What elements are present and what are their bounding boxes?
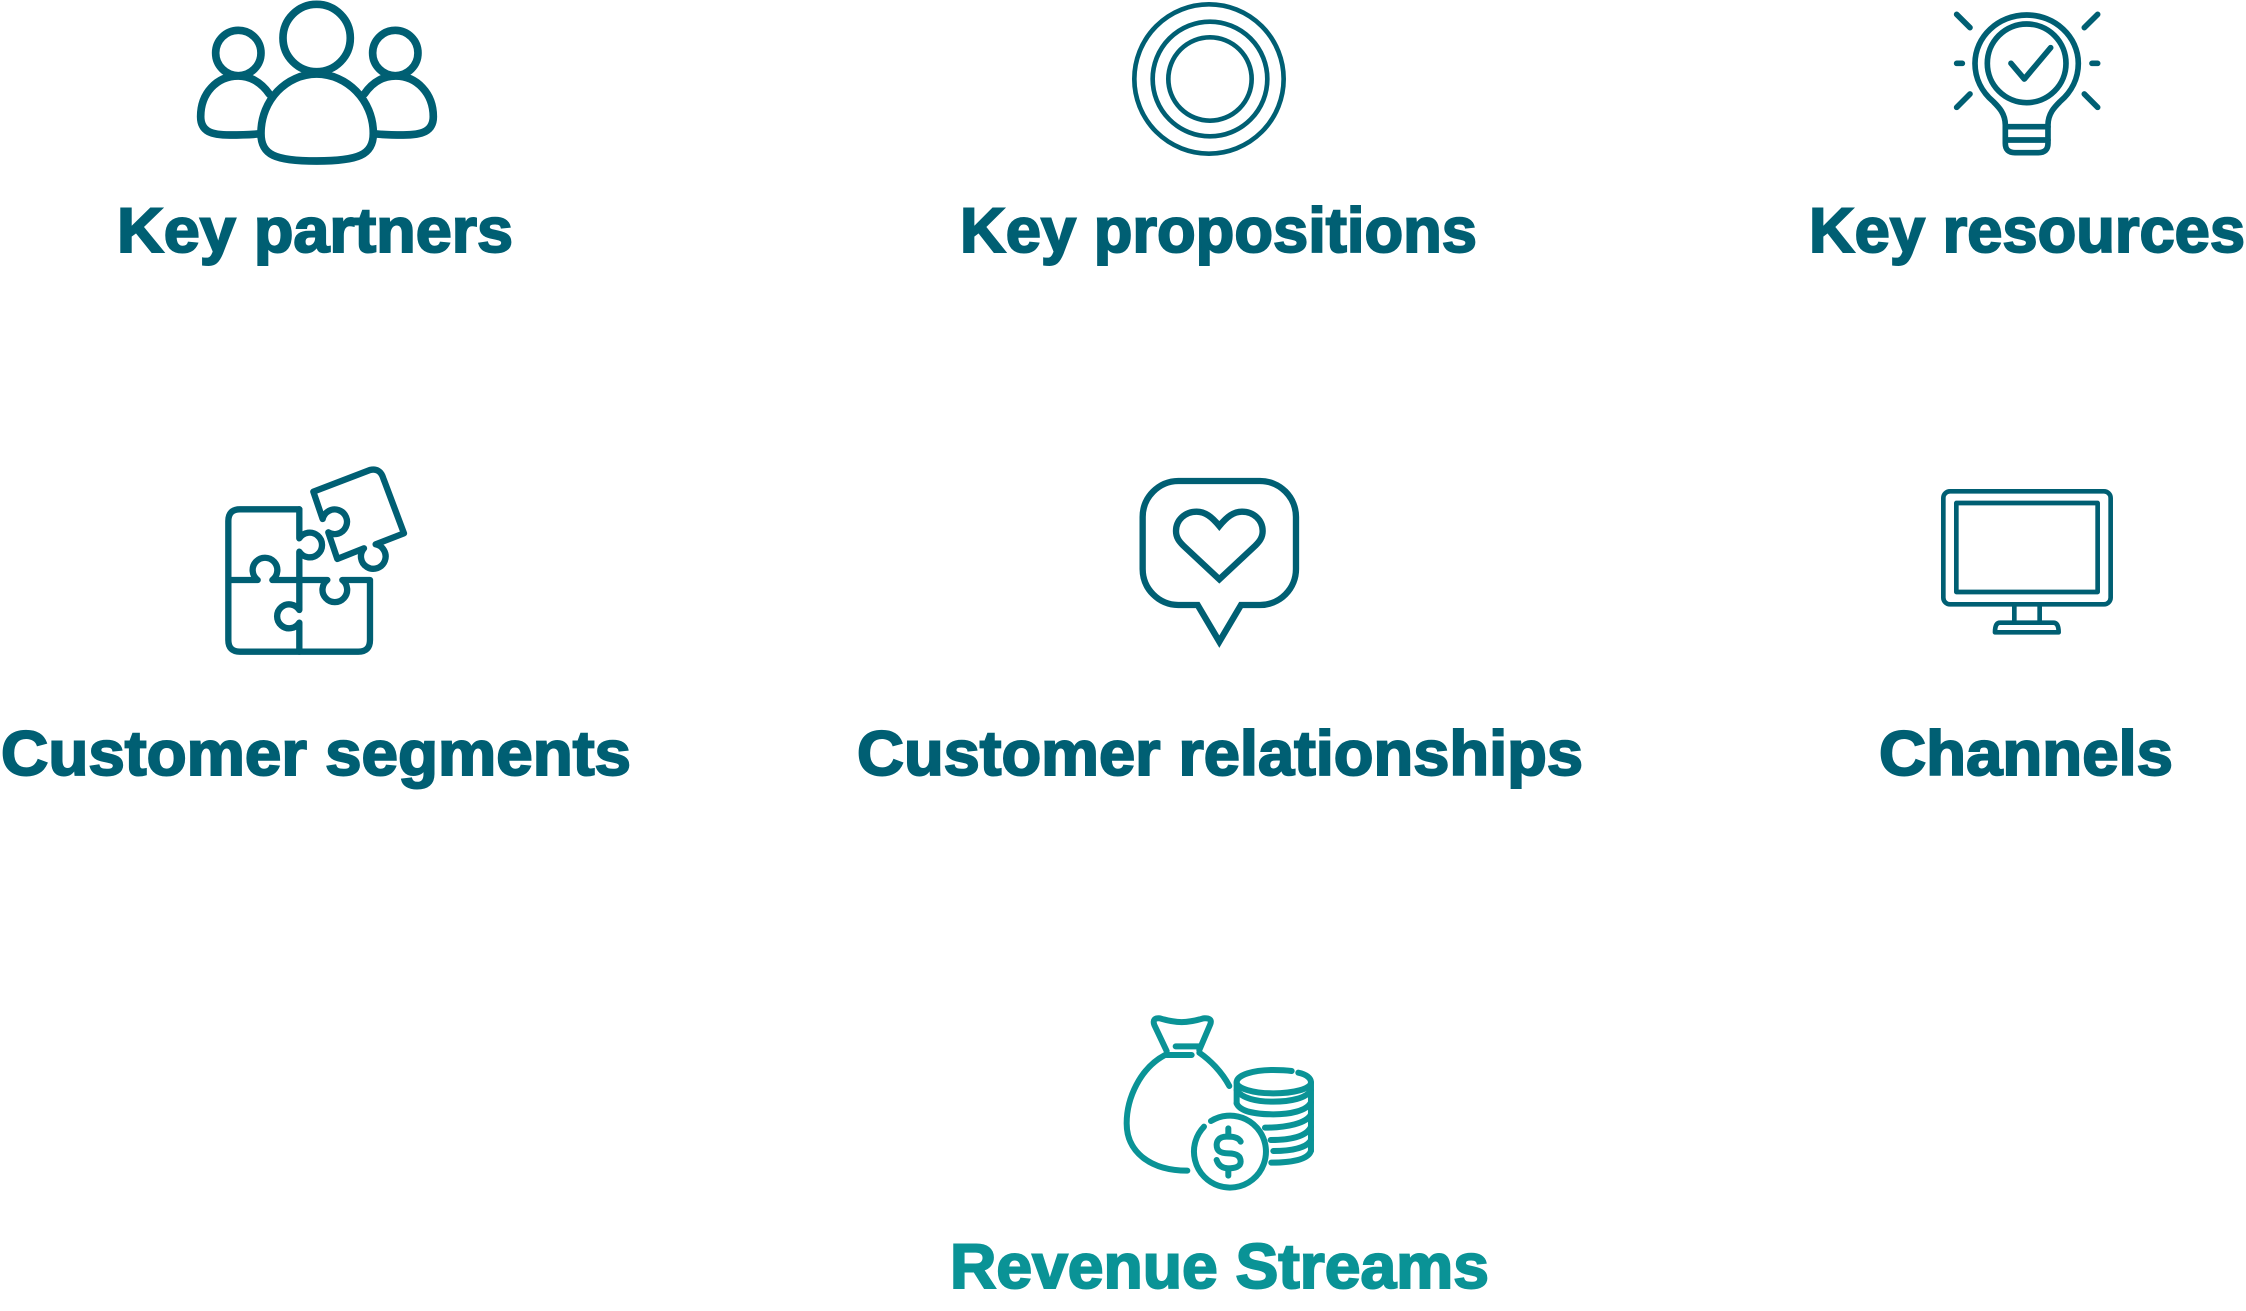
icon: money bag and coins [1127,1018,1311,1188]
icon: concentric circles [1134,4,1284,154]
panel: key resources [1809,14,2245,266]
heading: key propositions: Key propositions [960,196,1477,266]
heading: key partners: Key partners [117,196,513,266]
icon: speech bubble with heart [1143,481,1296,642]
heading: customer relationships: Customer relationships [857,719,1583,789]
heading: channels: Channels [1879,719,2173,789]
icon: computer monitor [1943,491,2111,632]
panel: key propositions [960,4,1477,266]
panel: channels [1879,491,2173,789]
heading: revenue streams: Revenue Streams [950,1232,1489,1302]
panel: key partners [117,4,513,266]
icon: group of people [201,4,433,161]
heading: key resources: Key resources [1809,196,2245,266]
heading: customer segments: Customer segments [1,719,631,789]
panel: customer segments [1,470,631,789]
icon: puzzle pieces [228,470,404,652]
panel: customer relationships [857,481,1583,789]
icon: light bulb with check mark [1957,14,2098,153]
panel: revenue streams [950,1018,1489,1302]
